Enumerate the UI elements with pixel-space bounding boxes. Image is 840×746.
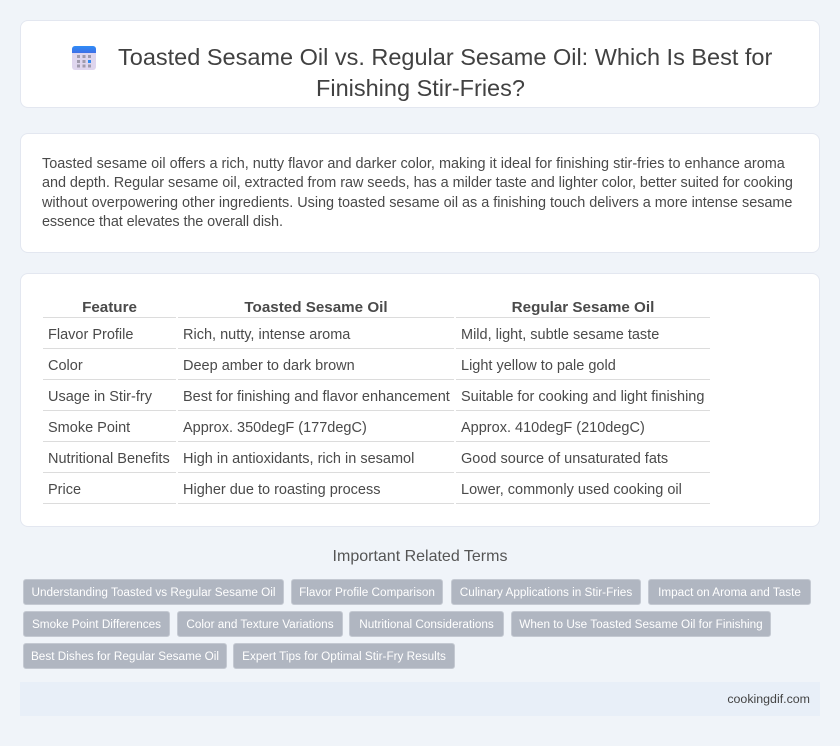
table header: Feature — [82, 299, 137, 316]
intro text: without overpowering other ingredients. Using toasted sesame oil as a finishing touch delivers a more intense sesame — [42, 194, 792, 210]
table header: Toasted Sesame Oil — [244, 299, 388, 316]
row: nutrition: High in antioxidants, rich in sesamol — [183, 451, 414, 467]
panel: introduction — [20, 133, 820, 253]
table header: Regular Sesame Oil — [512, 299, 654, 316]
footer source text: cookingdif.com — [727, 692, 810, 706]
related terms tags: Culinary Applications in Stir-Fries — [460, 586, 632, 599]
related terms tags: Expert Tips for Optimal Stir-Fry Results — [242, 650, 446, 663]
row: color: Light yellow to pale gold — [461, 358, 616, 374]
related terms tags: Color and Texture Variations — [186, 618, 334, 631]
related terms heading: Important Related Terms — [333, 548, 507, 565]
row: price: Price — [48, 482, 81, 498]
footer — [20, 682, 820, 716]
row: color: Color — [48, 358, 83, 374]
heading: Finishing Stir-Fries? — [316, 74, 525, 100]
related terms tags: When to Use Toasted Sesame Oil for Finishing — [519, 618, 763, 631]
related terms tags: Impact on Aroma and Taste — [658, 586, 801, 599]
panel: comparison table — [20, 273, 820, 527]
intro text: essence that elevates the overall dish. — [42, 214, 283, 230]
intro text: Toasted sesame oil offers a rich, nutty flavor and darker color, making it ideal for finishing stir-fries to enhance aroma — [42, 156, 785, 172]
related terms tags: Nutritional Considerations — [359, 618, 494, 631]
heading — [118, 44, 772, 101]
row: usage — [43, 389, 710, 411]
row: usage: Usage in Stir-fry — [48, 389, 152, 405]
row: color — [43, 358, 710, 380]
row: color: Deep amber to dark brown — [183, 358, 355, 374]
row: usage: Suitable for cooking and light finishing — [461, 389, 704, 405]
row: flavor profile: Rich, nutty, intense aroma — [183, 327, 350, 343]
row: smoke point: Approx. 350degF (177degC) — [183, 420, 367, 436]
row: flavor profile — [43, 327, 710, 349]
row: flavor profile: Mild, light, subtle sesame taste — [461, 327, 659, 343]
row: price — [43, 482, 710, 504]
related terms tags: Flavor Profile Comparison — [299, 586, 435, 599]
row: price: Higher due to roasting process — [183, 482, 380, 498]
intro text: and depth. Regular sesame oil, extracted from raw seeds, has a milder taste and lighter color, better suited for cooking — [42, 175, 793, 191]
row: smoke point: Approx. 410degF (210degC) — [461, 420, 645, 436]
related terms tags: Best Dishes for Regular Sesame Oil — [31, 650, 219, 663]
row: smoke point: Smoke Point — [48, 420, 130, 436]
row: nutrition: Nutritional Benefits — [48, 451, 170, 467]
row: nutrition: Good source of unsaturated fats — [461, 451, 668, 467]
related terms tags: Smoke Point Differences — [32, 618, 161, 631]
icon: calendar — [72, 46, 96, 70]
table header — [43, 299, 710, 318]
row: usage: Best for finishing and flavor enhancement — [183, 389, 450, 405]
row: smoke point — [43, 420, 710, 442]
intro text — [42, 156, 793, 230]
row: flavor profile: Flavor Profile — [48, 327, 133, 343]
related terms tags: Understanding Toasted vs Regular Sesame Oil — [31, 586, 276, 599]
row: nutrition — [43, 451, 710, 473]
panel: title — [20, 20, 820, 108]
heading: Toasted Sesame Oil vs. Regular Sesame Oil: Which Is Best for — [118, 44, 772, 70]
related terms tags — [23, 579, 811, 669]
row: price: Lower, commonly used cooking oil — [461, 482, 682, 498]
